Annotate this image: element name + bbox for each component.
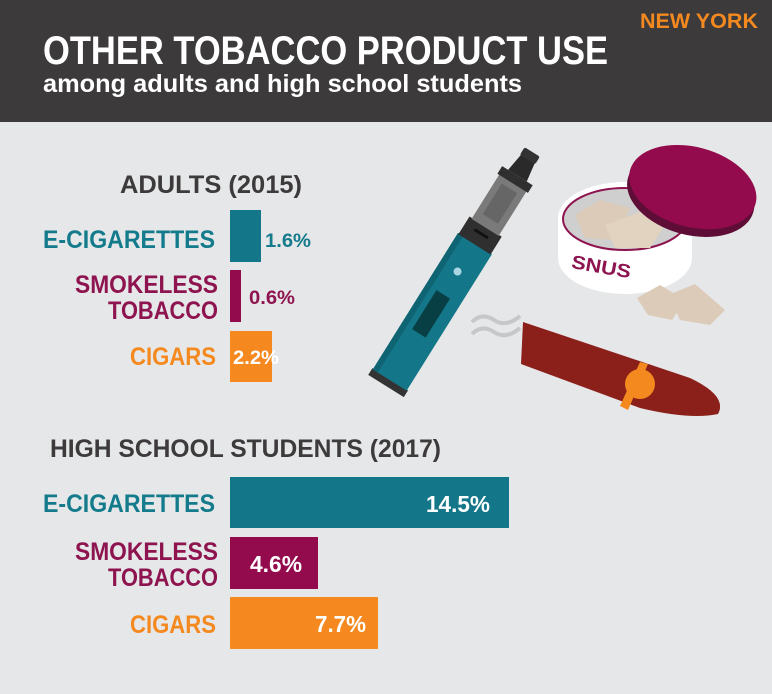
icon: snus tin: [558, 132, 766, 325]
bar: adult cigars: 2.2%: [233, 348, 279, 369]
bar: adult e-cigarettes: [43, 210, 311, 262]
bar: adult smokeless: SMOKELESS: [75, 271, 218, 299]
icon: smoke: [472, 316, 520, 335]
bar: hs smokeless: [75, 537, 318, 592]
bar: hs smokeless: 4.6%: [250, 551, 302, 577]
header: [0, 0, 772, 122]
panel: adults: [43, 171, 311, 382]
location label: NEW YORK: [640, 10, 758, 33]
bar: adult smokeless: [75, 270, 295, 325]
bar: adult cigars: [130, 331, 279, 382]
bar: hs e-cigarettes: [43, 477, 509, 528]
bar: hs smokeless: SMOKELESS: [75, 538, 218, 566]
title: OTHER TOBACCO PRODUCT USE: [43, 29, 608, 73]
icon: cigar: [521, 322, 720, 416]
bar: adult e-cigarettes: 1.6%: [265, 231, 311, 252]
bar: hs cigars: [130, 597, 378, 649]
bar: hs e-cigarettes: 14.5%: [426, 491, 490, 517]
panel: high school students: [43, 435, 509, 649]
bar: adult smokeless: TOBACCO: [108, 297, 218, 325]
heading: high school: HIGH SCHOOL STUDENTS (2017): [50, 435, 441, 463]
bar: adult e-cigarettes: E-CIGARETTES: [43, 226, 215, 254]
pouches: [637, 285, 685, 320]
bar: adult cigars: CIGARS: [130, 343, 216, 371]
bar: hs cigars: CIGARS: [130, 611, 216, 639]
bar: hs e-cigarettes: E-CIGARETTES: [43, 490, 215, 518]
bar: hs smokeless: TOBACCO: [108, 564, 218, 592]
subtitle: among adults and high school students: [43, 70, 522, 98]
icon: snus tin: SNUS: [570, 252, 632, 283]
bar: hs cigars: 7.7%: [315, 611, 366, 637]
icon: e-cigarette: [368, 141, 550, 397]
bar: adult smokeless: 0.6%: [249, 288, 295, 309]
heading: adults: ADULTS (2015): [120, 171, 302, 199]
